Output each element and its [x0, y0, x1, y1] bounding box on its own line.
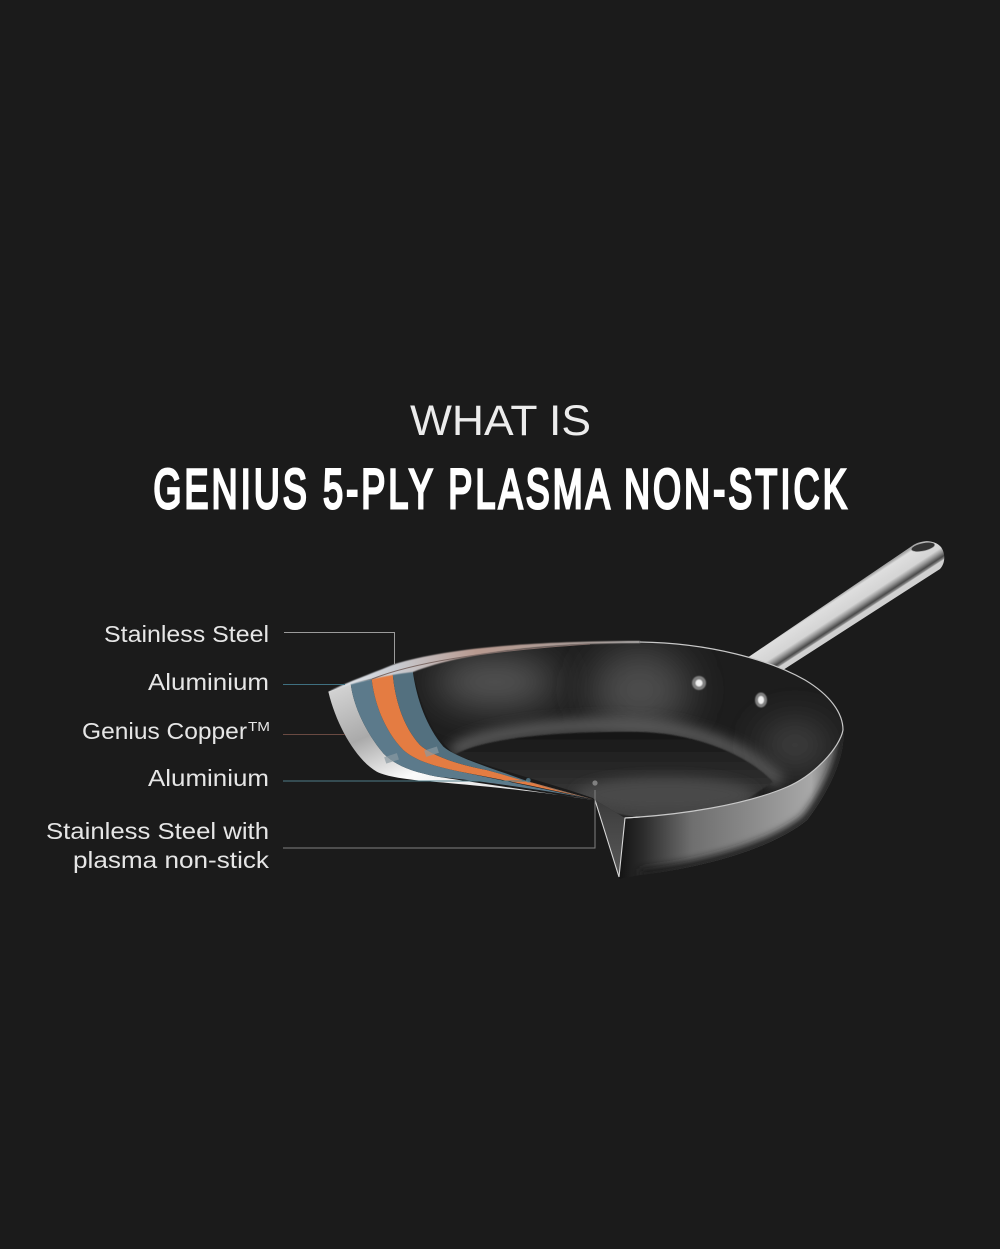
heading: genius 5-ply plasma non-stick: GENIUS 5-PLY PLASMA NON-STICK: [154, 457, 847, 520]
pan rim highlight: [625, 642, 843, 818]
marker ticks: [384, 746, 531, 783]
leader: aluminium bottom: [283, 780, 528, 782]
leader lines: [283, 632, 598, 848]
label: aluminium bottom: Aluminium: [148, 765, 269, 791]
notch cut face: [595, 800, 625, 877]
label: stainless steel with plasma non-stick: Stainless Steel with: [46, 818, 269, 844]
label: stainless steel with plasma non-stick: plasma non-stick: [73, 847, 270, 873]
pan outer body: [634, 732, 844, 876]
label: aluminium top: Aluminium: [148, 669, 269, 695]
layer labels: [46, 621, 270, 873]
cutaway top rim: [328, 641, 640, 692]
cutaway layers: [328, 671, 593, 800]
title: what is: WHAT IS: [410, 397, 591, 445]
pan handle: [747, 541, 944, 670]
layer: outer stainless steel: [328, 683, 593, 800]
label: genius copper: TM: [248, 719, 270, 734]
frying pan: [328, 541, 944, 885]
label: stainless steel: Stainless Steel: [104, 621, 269, 647]
layer: aluminium inner: [393, 671, 593, 799]
leader: plasma non-stick: [283, 780, 598, 848]
label: genius copper: Genius Copper: [82, 718, 247, 744]
label: stainless steel with plasma non-stick: [46, 818, 270, 873]
layer: genius copper: [372, 673, 593, 799]
rivets: [692, 676, 767, 708]
leader: stainless steel: [284, 632, 394, 664]
leader: aluminium top: [283, 684, 345, 686]
leader: copper: [283, 734, 345, 736]
layer: aluminium outer: [351, 679, 593, 799]
pan interior: [417, 642, 840, 818]
